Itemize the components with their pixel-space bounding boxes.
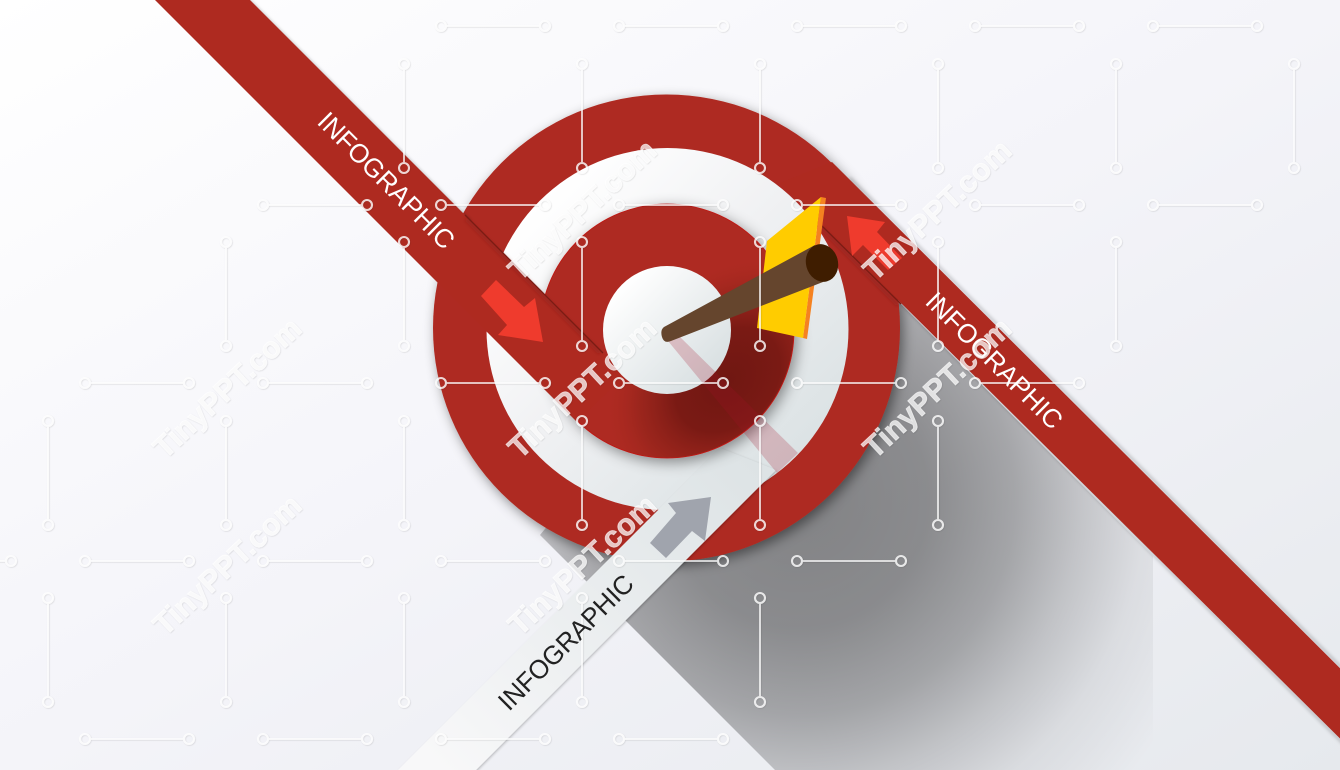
icon: red arrow right	[847, 216, 902, 270]
white ribbon	[398, 448, 776, 770]
ribbon fold soft	[466, 219, 600, 353]
watermark 4: TinyPPT.com	[502, 311, 663, 465]
outer red disc	[433, 94, 900, 562]
fletching edge	[803, 197, 826, 339]
arrow shadow stripe	[668, 335, 798, 473]
ribbon body	[155, 0, 625, 422]
shadow lower edge	[900, 302, 1340, 770]
shadow upper edge	[850, 178, 1340, 726]
fletching	[757, 197, 821, 338]
white ring	[486, 148, 848, 510]
watermark 7: TinyPPT.com	[857, 311, 1018, 465]
icon: grey arrow	[650, 497, 711, 558]
shaft	[661, 245, 823, 342]
watermark 5: TinyPPT.com	[502, 488, 663, 642]
inner white bullseye	[603, 266, 731, 394]
watermark 1: TinyPPT.com	[147, 311, 308, 465]
right ribbon soft shadows	[850, 178, 1340, 770]
shaft end cap	[802, 241, 842, 285]
ribbon fold line left	[465, 215, 603, 353]
fold right	[821, 226, 901, 305]
red ribbon: right	[780, 162, 1340, 770]
fold soft	[821, 228, 898, 305]
dark shading	[540, 204, 794, 458]
label: ribbon left: INFOGRAPHIC	[312, 106, 461, 255]
ribbon soft shadow	[152, 0, 470, 221]
watermark 3: TinyPPT.com	[502, 133, 663, 287]
inner red disc	[540, 204, 794, 458]
label: ribbon white: INFOGRAPHIC	[492, 568, 640, 716]
icon: red arrow left	[481, 280, 543, 342]
label: ribbon right: INFOGRAPHIC	[920, 286, 1069, 435]
fold line	[822, 226, 901, 304]
long cast shadow	[540, 303, 1153, 770]
watermark 6: TinyPPT.com	[857, 133, 1018, 287]
red ribbon: left	[152, 0, 625, 422]
watermark 2: TinyPPT.com	[147, 488, 308, 642]
watermarks	[147, 133, 1018, 642]
dart arrow	[661, 197, 842, 342]
